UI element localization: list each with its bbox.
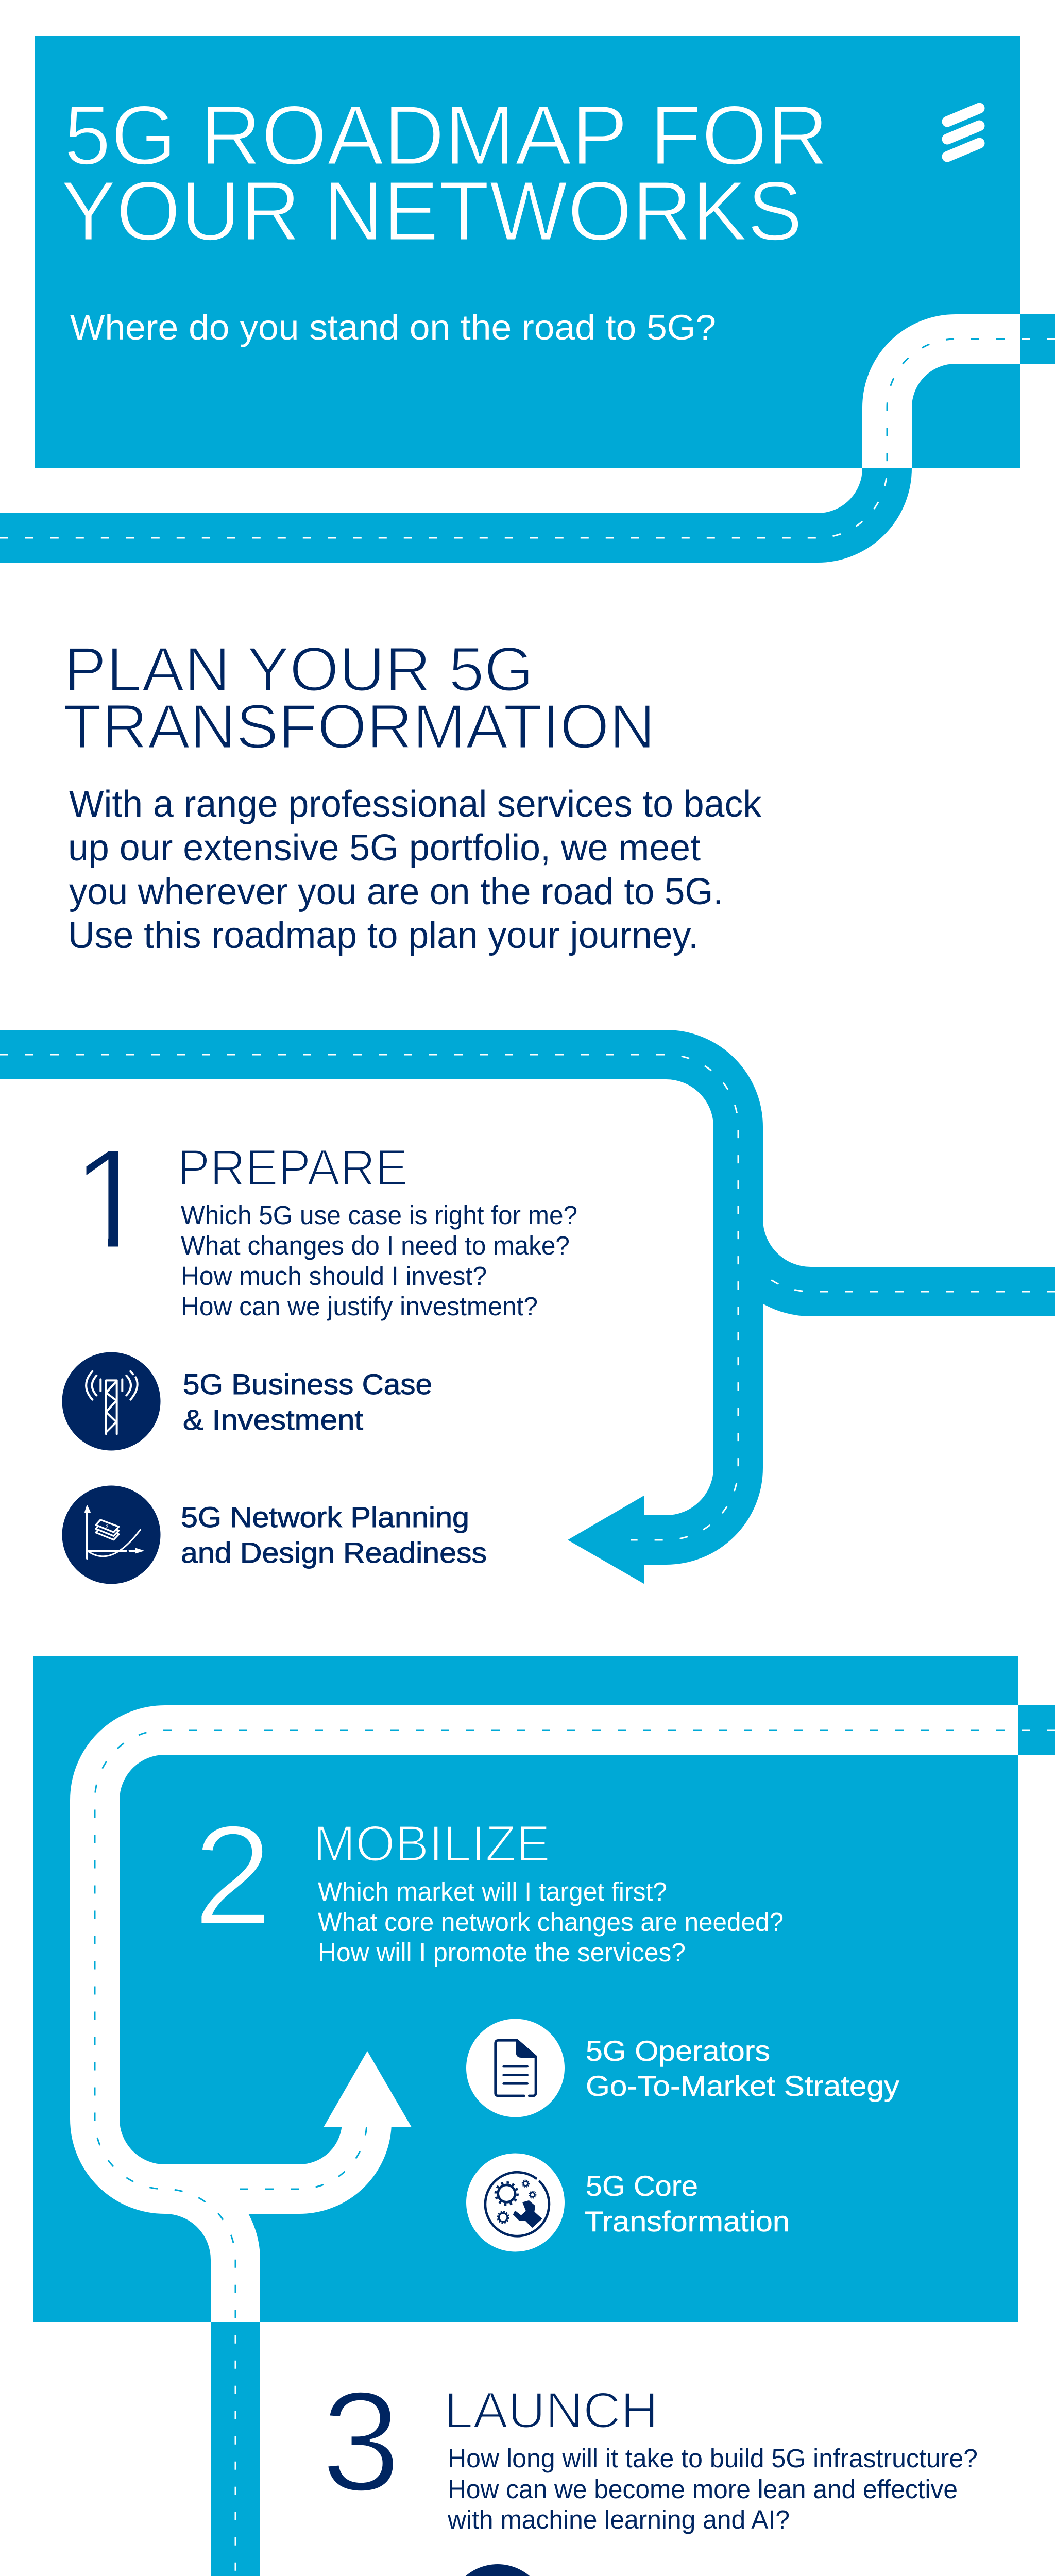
number 3: 3 xyxy=(321,2362,401,2521)
questions: How can we justify investment? xyxy=(181,1292,538,1321)
questions: Which market will I target first? xyxy=(318,1877,667,1906)
questions: How will I promote the services? xyxy=(318,1938,686,1967)
title: YOUR NETWORKS xyxy=(61,164,803,258)
heading: mobilize: MOBILIZE xyxy=(313,1815,550,1872)
service: 5G business case xyxy=(62,1352,432,1451)
questions: Which 5G use case is right for me? xyxy=(181,1200,577,1230)
heading: prepare: PREPARE xyxy=(177,1139,408,1196)
intro text xyxy=(68,784,762,956)
heading: plan your 5G transformation: PLAN YOUR 5G xyxy=(64,634,534,704)
icon: gears and wrench xyxy=(466,2154,565,2251)
service: operators go-to-market: 5G Operators xyxy=(586,2035,770,2067)
step 2: mobilize xyxy=(193,1796,899,2251)
road: header route xyxy=(0,339,1055,538)
icon: document xyxy=(466,2019,565,2117)
intro text: you wherever you are on the road to 5G. xyxy=(69,871,723,912)
step 3: launch xyxy=(321,2362,978,2576)
road: mobilize route through launch to customers xyxy=(95,1730,1055,2576)
step 1: prepare xyxy=(62,1120,577,1584)
icon: antenna tower xyxy=(62,1352,161,1451)
service: core transformation: 5G Core xyxy=(586,2170,698,2202)
icon: Ericsson logo xyxy=(947,108,979,157)
questions: What changes do I need to make? xyxy=(181,1231,570,1260)
heading: plan your 5G transformation xyxy=(63,634,655,761)
road: prepare route with left arrow xyxy=(0,1055,1055,1584)
questions xyxy=(181,1200,577,1321)
heading: launch: LAUNCH xyxy=(444,2382,658,2438)
questions: How much should I invest? xyxy=(181,1261,487,1291)
number 2: 2 xyxy=(193,1796,272,1955)
service: core transformation xyxy=(466,2154,790,2251)
subtitle: Where do you stand on the road to 5G? xyxy=(70,308,716,347)
heading: plan your 5G transformation: TRANSFORMATION xyxy=(63,691,655,761)
service: operators go-to-market: Go-To-Market Strategy xyxy=(586,2070,899,2102)
service: accelerated network build xyxy=(448,2564,856,2576)
questions: What core network changes are needed? xyxy=(318,1907,784,1937)
service: operators go-to-market xyxy=(466,2019,899,2117)
service: 5G network planning: and Design Readiness xyxy=(181,1536,487,1569)
icon: cost chart: $ xyxy=(105,1524,108,1529)
service: 5G network planning xyxy=(62,1486,487,1584)
intro text: up our extensive 5G portfolio, we meet xyxy=(68,827,701,869)
questions: How long will it take to build 5G infrastructure? xyxy=(448,2444,978,2473)
panel: header background xyxy=(35,36,1020,468)
intro text: Use this roadmap to plan your journey. xyxy=(68,915,699,956)
service: 5G network planning: 5G Network Planning xyxy=(181,1501,469,1533)
questions xyxy=(318,1877,784,1967)
questions: with machine learning and AI? xyxy=(447,2505,790,2534)
intro text: With a range professional services to back xyxy=(69,784,762,825)
icon: cost chart xyxy=(62,1486,161,1584)
title xyxy=(61,88,828,258)
icon: tower with shapes xyxy=(448,2564,547,2576)
service: 5G business case: & Investment xyxy=(183,1403,363,1436)
number 1: 1 xyxy=(71,1120,150,1278)
service: core transformation: Transformation xyxy=(585,2205,790,2238)
service: 5G business case: 5G Business Case xyxy=(183,1368,432,1400)
questions xyxy=(447,2444,978,2534)
questions: How can we become more lean and effective xyxy=(448,2475,958,2504)
title: 5G ROADMAP FOR xyxy=(64,88,828,182)
panel: mobilize background xyxy=(33,1656,1018,2322)
